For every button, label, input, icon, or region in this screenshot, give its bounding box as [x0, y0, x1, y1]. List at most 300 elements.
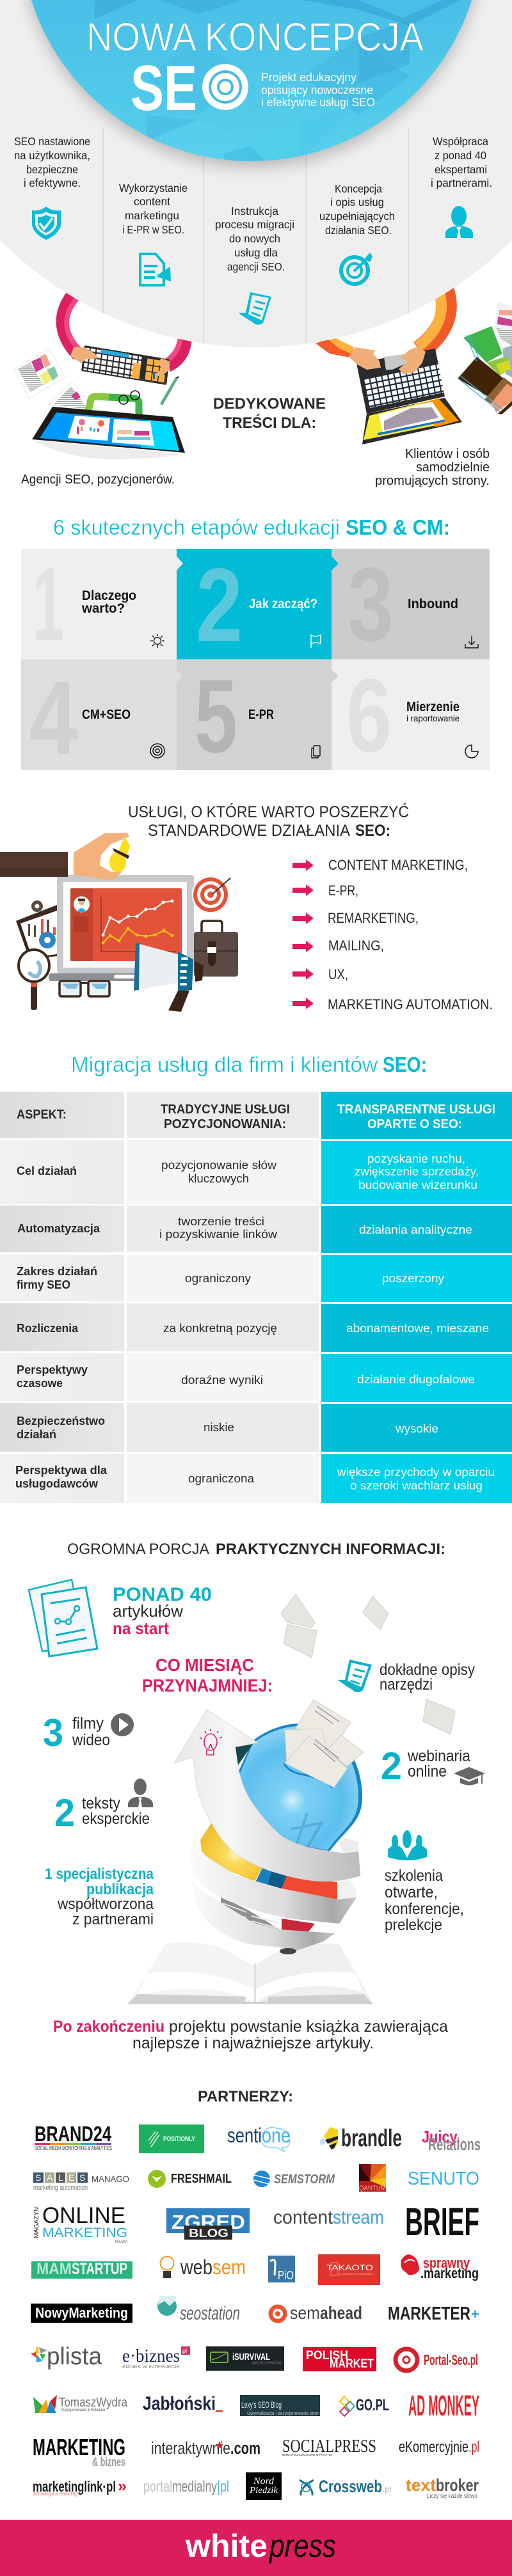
stage 1: [21, 546, 177, 663]
logo: eKomercyjnie.pl: eKomercyjnie: [399, 2439, 468, 2456]
logo: signature square: Piedzik: [249, 2486, 278, 2495]
illustration: marketing laptop scene: [0, 833, 238, 1012]
feature 2: content marketing and E-PR: Wykorzystanie: [119, 182, 188, 194]
logo: Zgred Blog: [166, 2208, 250, 2240]
feature 4: complementary services: uzupełniających: [319, 210, 395, 223]
row: Automatyzacja: działania analityczne: [359, 1223, 472, 1236]
row: Zakres działań firmy SEO: ograniczony: [185, 1271, 252, 1285]
feature 1: user-oriented SEO: [14, 135, 90, 240]
row: Cel działań: pozycjonowanie słów: [161, 1158, 277, 1172]
logo: Qantum: QANTUM: [359, 2185, 386, 2192]
logo: Juicy Relations: Juicy.: [422, 2127, 460, 2146]
bulb glass: [236, 1724, 362, 1851]
stage 4: [21, 659, 177, 776]
logo: semahead: ahead: [320, 2303, 362, 2323]
row: Rozliczenia: Rozliczenia: [17, 1321, 79, 1335]
row: Bezpieczeństwo działań: wysokie: [395, 1422, 438, 1435]
text: over 40 articles: na start: [113, 1619, 169, 1638]
item: e-pr: E-PR,: [328, 883, 358, 899]
text: over 40 articles: artykułów: [113, 1601, 183, 1621]
item: 3 videos: wideo: [72, 1731, 110, 1749]
stage 6: Mierzenie: [406, 700, 460, 714]
stage 3: [332, 546, 490, 663]
icon: download: [465, 636, 478, 648]
logo: signature square: Nord: [253, 2476, 275, 2486]
heading: practical information: PRAKTYCZNYCH INFORMACJI:: [216, 1541, 445, 1558]
row: Perspektywy czasowe: [0, 1353, 512, 1402]
logo: brandle: brandle: [341, 2125, 402, 2152]
item: remarketing: [292, 910, 419, 926]
row: Rozliczenia: [0, 1303, 512, 1352]
feature 2: content marketing and E-PR: i E-PR w SEO.: [122, 223, 184, 236]
item: 2 webinars: 2: [381, 1745, 402, 1787]
item: 2 webinars: [381, 1745, 485, 1787]
heading: 6 stages: 6 skutecznych etapów edukacji: [53, 515, 340, 539]
partner logos: [31, 2122, 481, 2500]
icon: document with megaphone: [140, 254, 171, 285]
logo: contentstream: [273, 2207, 384, 2228]
logo: SEMSTORM: [253, 2171, 335, 2187]
icon: list sheet: [338, 1660, 372, 1692]
logo: eKomercyjnie.pl: .pl: [468, 2439, 479, 2456]
logo: websem: web: [180, 2256, 212, 2279]
item: 2 expert texts: [54, 1779, 153, 1834]
logo: Takaoto: TAKAOTO: [326, 2263, 373, 2272]
logo: e-biznes: e·biznes: [122, 2346, 180, 2366]
logo: Lexy's SEO Blog: Lexy's SEO Blog: [241, 2399, 282, 2410]
row: Perspektywy czasowe: czasowe: [17, 1376, 63, 1390]
logo: sprawny.marketing: sprawny: [423, 2255, 470, 2271]
heading: dedicated content: [213, 395, 326, 432]
footer: whitepress brand bar: press: [268, 2528, 336, 2564]
logo: Juicy Relations: [422, 2127, 481, 2154]
item: mailing: MAILING,: [328, 938, 384, 954]
heading: every month: PRZYNAJMNIEJ:: [142, 1676, 273, 1695]
text: clients: samodzielnie: [416, 460, 490, 475]
heading: migration: SEO:: [383, 1053, 427, 1076]
text: book after project: [53, 2018, 448, 2052]
logo: websem: sem: [212, 2256, 246, 2279]
logo: Juicy Relations: Relations: [428, 2135, 481, 2154]
icon: sun: [150, 634, 164, 648]
stage 6: 6: [346, 657, 392, 774]
logo: Takaoto: [318, 2254, 380, 2285]
logo: Portal-Seo.pl: [396, 2349, 478, 2371]
logo: BRAND24: BRAND24: [35, 2122, 111, 2146]
book: [127, 1942, 373, 2004]
row: Rozliczenia: za konkretną pozycję: [163, 1321, 277, 1335]
icon: graduation cap: [454, 1767, 485, 1786]
stage 1: warto?: [81, 601, 125, 616]
logo: SentiOne: senti: [227, 2124, 262, 2147]
heading: services: SEO:: [355, 822, 390, 840]
text: book after project: projektu powstanie książka zawierająca: [169, 2018, 448, 2036]
illustration: light bulb with arrow ribbon on a book: [127, 1700, 373, 2004]
item: trainings: otwarte,: [385, 1883, 438, 1901]
logo: contentstream: stream: [333, 2207, 384, 2228]
table header: OPARTE O SEO:: [367, 1117, 462, 1131]
heading: practical information: [67, 1541, 445, 1558]
clipboard: [16, 900, 57, 959]
footer: whitepress brand bar: [0, 2520, 512, 2576]
upper ribbon with arrow: [174, 1709, 360, 1881]
logo: e-biznes: pl: [182, 2348, 187, 2354]
row: Perspektywa dla usługodawców: usługodawców: [15, 1477, 99, 1490]
subtitle: project description: opisujący nowoczesne: [261, 84, 373, 97]
logo: NowyMarketing: NowyMarketing: [35, 2305, 128, 2321]
logo: marketinglink.pl: technologia & marketing: [33, 2491, 77, 2497]
text: over 40 articles: PONAD 40: [113, 1584, 212, 1605]
table header: [0, 1092, 512, 1139]
item: ux: [292, 966, 348, 982]
icon: play: [111, 1713, 134, 1736]
item: specialist publication: współtworzona: [57, 1896, 154, 1913]
item: tool descriptions: dokładne opisy: [380, 1661, 475, 1679]
icon: bulb idea: [200, 1729, 222, 1755]
logo: Online Marketing magazine: ONLINE: [42, 2203, 125, 2228]
logo: seostation: [157, 2296, 240, 2324]
logo: PiO: PiO: [278, 2269, 294, 2282]
logo: SALESmanago: marketing automation: [33, 2184, 88, 2192]
item: trainings: prelekcje: [385, 1916, 442, 1934]
heading: partners: PARTNERZY:: [198, 2088, 293, 2105]
logo: semahead: sem: [290, 2303, 320, 2323]
feature 5: cooperation with experts: ekspertami: [435, 163, 487, 176]
logo: SALESmanago: S: [35, 2172, 41, 2183]
text: book after project: Po zakończeniu: [53, 2018, 164, 2036]
footer: whitepress brand bar: white: [185, 2528, 268, 2564]
heading: services: USŁUGI, O KTÓRE WARTO POSZERZYĆ: [128, 803, 409, 821]
row: Zakres działań firmy SEO: [0, 1255, 512, 1302]
feature 2: content marketing and E-PR: [119, 182, 188, 285]
row: Cel działań: Cel działań: [17, 1164, 77, 1177]
logo: SentiOne: [227, 2124, 291, 2151]
glasses: [60, 981, 109, 996]
text: agencies: Agencji SEO, pozycjonerów.: [21, 473, 175, 487]
row: Cel działań: kluczowych: [188, 1172, 249, 1185]
logo: MamStartup: MAM: [36, 2260, 72, 2278]
logo: semahead: [269, 2303, 362, 2323]
row: Perspektywa dla usługodawców: ograniczona: [188, 1472, 255, 1485]
subtitle: project description: Projekt edukacyjny: [261, 71, 356, 84]
logo: PiO: [268, 2256, 295, 2282]
row: Automatyzacja: [0, 1206, 512, 1253]
item: mailing: [292, 938, 384, 954]
feature 4: complementary services: i opis usług: [330, 196, 384, 208]
logo: BRAND24: SOCIAL MEDIA MONITORING & ANALYTICS: [35, 2145, 112, 2151]
stage 1: 1: [33, 546, 64, 663]
logo: interaktywnie.com: .com: [230, 2439, 260, 2458]
heading: dedicated content: DEDYKOWANE: [213, 395, 326, 412]
stage 6: [332, 657, 490, 774]
item: specialist publication: [45, 1865, 154, 1928]
logo: textbroker: [406, 2476, 479, 2500]
logo: sprawny.marketing: .marketing: [420, 2265, 479, 2281]
heading: practical information: OGROMNA PORCJA: [67, 1541, 209, 1558]
item: trainings: konferencje,: [385, 1900, 464, 1918]
logo: Crossweb: .pl: [383, 2484, 391, 2494]
text: book after project: najlepsze i najważniejsze artykuły.: [132, 2034, 374, 2052]
panel: grey header circle: [0, 0, 512, 384]
feature 5: cooperation with experts: Współpraca: [433, 135, 488, 148]
logo: SocialPress: SOCIALPRESS: [282, 2437, 376, 2456]
feature 1: user-oriented SEO: i efektywne.: [24, 177, 81, 189]
logo: iSurvival: [206, 2346, 284, 2371]
logo: marketinglink.pl: marketinglink·pl: [33, 2478, 116, 2495]
logo: textbroker: text: [406, 2476, 436, 2495]
item: 3 videos: filmy: [72, 1715, 104, 1732]
logo: Tomasz Wydra: [33, 2395, 128, 2413]
icon: target with arrow: [341, 253, 372, 284]
feature 5: cooperation with experts: z ponad 40: [435, 149, 486, 162]
stage 1: Dlaczego: [82, 588, 136, 603]
logo: marketinglink.pl: [33, 2476, 127, 2497]
logo: brandle: [320, 2125, 402, 2152]
illustration: papers on the desk, left: [13, 349, 98, 409]
row: Bezpieczeństwo działań: działań: [17, 1427, 56, 1441]
item: trainings: szkolenia: [385, 1867, 443, 1885]
feature 3: migration instructions: usług dla: [234, 246, 278, 259]
table header: ASPEKT:: [17, 1108, 67, 1122]
logo: MamStartup: STARTUP: [72, 2260, 127, 2278]
logo: Lexy's SEO Blog: Optymalizacja i pozycjonowanie stron: [247, 2410, 319, 2416]
logo: Positionly: POSITIONLY: [163, 2135, 196, 2143]
logo: SALESmanago: S: [79, 2172, 85, 2183]
logo: Marketing & Biznes: [33, 2434, 125, 2469]
item: specialist publication: 1 specjalistyczna: [45, 1865, 154, 1883]
icon: shield: [32, 207, 61, 240]
logo: Qantum: [359, 2164, 386, 2192]
logo: Marketing & Biznes: & biznes: [92, 2456, 125, 2469]
logo: contentstream: content: [273, 2207, 333, 2228]
logo: Portal-Seo.pl: Portal-Seo.pl: [424, 2352, 478, 2368]
row: Automatyzacja: Automatyzacja: [17, 1221, 100, 1235]
logo: seostation: seostation: [180, 2303, 240, 2324]
stage 4: CM+SEO: [82, 707, 131, 722]
row: Bezpieczeństwo działań: Bezpieczeństwo: [17, 1414, 105, 1427]
logo: SALESmanago: L: [58, 2172, 63, 2183]
logo: SEMSTORM: SEMSTORM: [274, 2172, 335, 2187]
item: marketing automation: MARKETING AUTOMATION.: [328, 996, 493, 1012]
row: Cel działań: [0, 1140, 512, 1204]
logo: SocialPress: MEDIA SPOŁECZNOŚCIOWE W PRAKTYCE: [282, 2452, 332, 2456]
stage 2: 2: [196, 546, 243, 663]
logo: iSurvival: iSURVIVAL: [232, 2352, 270, 2362]
logo: SALESmanago: E: [68, 2172, 74, 2183]
heading: dedicated content: TREŚCI DLA:: [223, 414, 316, 432]
logo: SALESmanago: A: [47, 2172, 53, 2183]
logo: Jabłoński: Jabłoński: [143, 2393, 216, 2414]
logo: interaktywnie.com: interaktywnie: [151, 2439, 230, 2458]
illustration: laptop with hands: [349, 347, 462, 444]
row: Perspektywa dla usługodawców: większe przychody w oparciu: [337, 1465, 495, 1479]
logo: websem: [160, 2256, 246, 2279]
logo: Marketer+: MARKETER: [388, 2304, 470, 2324]
logo: e-biznes: BIZNES W INTERNECIE: [122, 2366, 180, 2369]
item: 3 videos: 3: [43, 1711, 63, 1754]
item: 2 webinars: online: [408, 1763, 447, 1780]
stage 4: 4: [29, 659, 77, 776]
logo: plista: plista: [47, 2343, 102, 2370]
illustration: keyboard with hands: [70, 345, 170, 385]
logo: SALESmanago: [33, 2172, 129, 2192]
item: 2 webinars: webinaria: [407, 1747, 470, 1765]
row: Bezpieczeństwo działań: [0, 1403, 512, 1452]
item: 2 expert texts: eksperckie: [82, 1810, 150, 1828]
logo: MamStartup: [31, 2260, 132, 2279]
illustration: right orange arms: [316, 289, 447, 357]
feature 3: migration instructions: Instrukcja: [231, 205, 278, 217]
logo: Senuto: SENUTO: [408, 2169, 479, 2189]
icon: articles document: [29, 1580, 97, 1656]
logo: portalmedialny.pl: [143, 2478, 229, 2495]
row: Perspektywy czasowe: Perspektywy: [17, 1363, 88, 1376]
heading: 6 stages: SEO & CM:: [346, 515, 450, 539]
item: e-pr: [292, 883, 358, 899]
feature 2: content marketing and E-PR: content: [134, 195, 170, 208]
logo: Online Marketing magazine: [33, 2203, 127, 2244]
row: Automatyzacja: i pozyskiwanie linków: [159, 1227, 278, 1241]
newspapers: [285, 1700, 364, 1787]
feature 3: migration instructions: agencji SEO.: [227, 260, 285, 273]
logo: Positionly: [139, 2124, 204, 2153]
subtitle: project description: [261, 71, 375, 109]
item: 3 videos: [43, 1711, 134, 1754]
item: 2 expert texts: teksty: [82, 1795, 120, 1812]
row: Zakres działań firmy SEO: firmy SEO: [17, 1278, 70, 1291]
heading: migration: Migracja usług dla firm i klientów: [71, 1053, 378, 1076]
item: ux: UX,: [328, 966, 348, 982]
logo: textbroker: broker: [436, 2476, 479, 2495]
feature 1: user-oriented SEO: na użytkownika,: [14, 149, 90, 162]
icon: list sheet: [238, 292, 271, 325]
text: over 40 articles: [113, 1584, 212, 1638]
logo: portalmedialny.pl: portal: [143, 2478, 172, 2495]
logo: GO.PL: [340, 2396, 389, 2416]
stage 3: 3: [348, 546, 394, 663]
title: SEO wordmark with target: SE: [131, 52, 197, 124]
logo: SALESmanago: MANAGO: [92, 2174, 129, 2184]
illustration: green folder with glasses and pencil: [88, 376, 179, 416]
logo: iSurvival: MACIEJ LEWIŃSKI: [252, 2361, 282, 2366]
stage 2: Jak zacząć?: [249, 597, 317, 611]
illustration: tablet: [32, 407, 185, 459]
logo: Marketing & Biznes: MARKETING: [33, 2434, 125, 2460]
icon: target: [150, 744, 164, 758]
icon: people: [388, 1830, 427, 1860]
feature 4: complementary services: Koncepcja: [335, 182, 382, 195]
heading: services: STANDARDOWE DZIAŁANIA: [148, 822, 350, 840]
row: Automatyzacja: tworzenie treści: [178, 1214, 264, 1228]
feature 5: cooperation with experts: i partnerami.: [431, 177, 492, 189]
row: Cel działań: budowanie wizerunku: [358, 1178, 477, 1191]
stage 5: 5: [195, 657, 237, 774]
logo: Zgred Blog: BLOG: [189, 2227, 228, 2240]
item: tool descriptions: narzędzi: [380, 1676, 433, 1693]
magnifier: [19, 950, 49, 1010]
bulb cap segments: [200, 1821, 264, 1881]
logo: SentiOne: one: [262, 2124, 291, 2147]
logo: Polish Market: POLISH: [306, 2349, 348, 2362]
row: Cel działań: zwiększenie sprzedaży,: [355, 1165, 479, 1178]
logo: sprawny.marketing: [401, 2254, 479, 2281]
feature 1: user-oriented SEO: SEO nastawione: [14, 135, 90, 148]
stage 5: E-PR: [248, 707, 274, 722]
table header: TRADYCYJNE USŁUGI: [161, 1103, 290, 1117]
item: trainings: [385, 1830, 464, 1934]
row: Zakres działań firmy SEO: poszerzony: [382, 1271, 445, 1285]
item: specialist publication: z partnerami: [72, 1911, 154, 1928]
item: content marketing: CONTENT MARKETING,: [328, 857, 468, 873]
logo: signature square: [246, 2472, 282, 2500]
illustration: books and papers, right: [458, 302, 512, 414]
row: Rozliczenia: abonamentowe, mieszane: [346, 1321, 489, 1335]
logo: FreshMail: FRESHMAIL: [171, 2172, 232, 2186]
item: 2 expert texts: 2: [54, 1791, 75, 1834]
row: Bezpieczeństwo działań: niskie: [204, 1420, 234, 1434]
feature 3: migration instructions: procesu migracji: [215, 218, 294, 231]
icon: pie chart: [465, 745, 478, 758]
logo: Zgred Blog: ZGRED: [172, 2211, 245, 2233]
subtitle: project description: i efektywne usługi SEO: [261, 96, 375, 109]
icon: flag: [311, 635, 321, 648]
item: specialist publication: publikacja: [86, 1881, 154, 1898]
row: Perspektywa dla usługodawców: o szeroki wachlarz usług: [350, 1479, 483, 1492]
panel: blue title circle: [20, 0, 483, 168]
feature 4: complementary services: działania SEO.: [325, 224, 392, 237]
title: NOWA KONCEPCJA: NOWA KONCEPCJA: [86, 15, 424, 59]
hand holding rocket bulb: [0, 833, 130, 881]
logo: FreshMail: [148, 2170, 232, 2188]
row: Zakres działań firmy SEO: Zakres działań: [17, 1264, 97, 1278]
item: remarketing: REMARKETING,: [328, 910, 419, 926]
table header: TRANSPARENTNE USŁUGI: [337, 1103, 495, 1117]
row: Perspektywy czasowe: doraźne wyniki: [181, 1373, 263, 1386]
briefcase: [194, 921, 238, 977]
feature 3: migration instructions: [215, 205, 294, 325]
logo: BRAND24: [35, 2122, 112, 2151]
item: tool descriptions: [338, 1660, 475, 1693]
text: clients: [375, 447, 490, 488]
feature 5: cooperation with experts: [431, 135, 492, 238]
row: Perspektywa dla usługodawców: Perspektywa dla: [15, 1463, 108, 1477]
table header: POZYCJONOWANIA:: [164, 1117, 286, 1131]
illustration: flying newspapers: [281, 1594, 455, 1734]
logo: Online Marketing magazine: MARKETING: [42, 2226, 127, 2240]
logo: portalmedialny.pl: medialny: [172, 2478, 217, 2495]
icon: person: [445, 206, 473, 238]
laptop: [49, 875, 194, 981]
target: [192, 876, 230, 913]
logo: Polish Market: [303, 2347, 376, 2371]
list: extra services: [292, 857, 493, 1012]
feature 3: migration instructions: do nowych: [229, 232, 280, 245]
logo: Crossweb: Crossweb: [319, 2477, 382, 2496]
text: clients: promujących strony.: [375, 474, 490, 488]
logo: Online Marketing magazine: MAGAZYN: [33, 2207, 40, 2238]
logo: GO.PL: GO.PL: [356, 2396, 389, 2414]
logo: Lexy's SEO Blog: [240, 2395, 320, 2416]
stage 2: [177, 546, 332, 663]
icon: pages: [312, 746, 320, 758]
logo: Takaoto: e-commerce & marketing: [339, 2272, 372, 2275]
feature 1: user-oriented SEO: bezpieczne: [26, 163, 78, 176]
logo: portalmedialny.pl: |pl: [217, 2478, 229, 2495]
stage 3: Inbound: [408, 597, 458, 611]
illustration: left pink arms: [62, 293, 186, 366]
megaphone: [134, 943, 204, 1012]
logo: Marketer+: +: [471, 2306, 479, 2322]
